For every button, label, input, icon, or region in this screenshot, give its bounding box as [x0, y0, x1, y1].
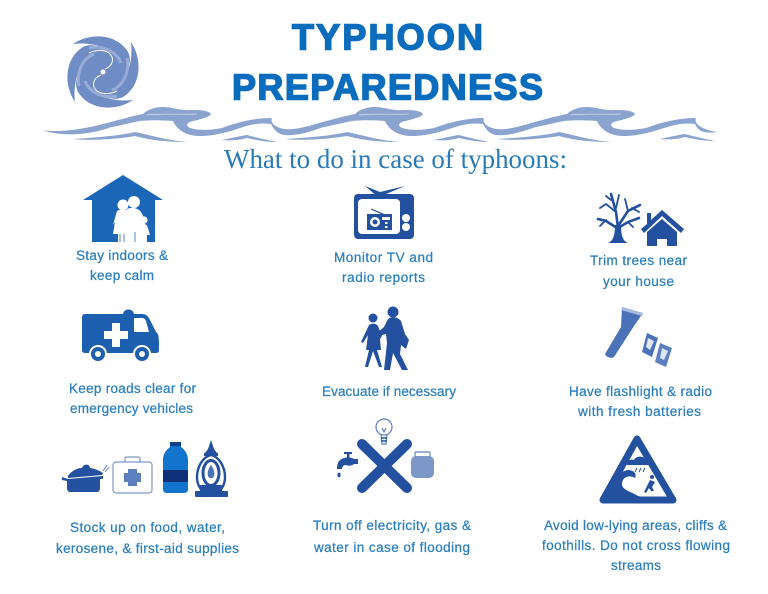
panel: keep roads clear: [69, 310, 196, 416]
icon: bare tree and house: [598, 194, 684, 246]
panel: turn off utilities: [313, 419, 471, 555]
label: your house: [603, 274, 674, 289]
label: with fresh batteries: [577, 404, 701, 419]
panel: evacuate: [322, 306, 456, 399]
icon: house with family: [83, 175, 163, 242]
panel: avoid low-lying areas: [542, 439, 730, 573]
panel: stock up: [56, 440, 239, 556]
label: streams: [611, 558, 661, 573]
label: Stock up on food, water,: [70, 520, 225, 535]
icon: water faucet: [337, 452, 358, 477]
label: [334, 250, 433, 285]
icon: first-aid kit: [113, 457, 152, 493]
subtitle: What to do in case of typhoons:: [224, 144, 567, 174]
label: [569, 384, 712, 419]
label: Stay indoors &: [76, 248, 168, 263]
label: Avoid low-lying areas, cliffs &: [544, 518, 727, 533]
icon: ambulance: [82, 310, 159, 363]
label: Evacuate if necessary: [322, 384, 456, 399]
icon: water bottle: [163, 442, 188, 493]
label: Have flashlight & radio: [569, 384, 712, 399]
icon: landslide warning triangle: [602, 439, 676, 503]
label: emergency vehicles: [70, 401, 193, 416]
label: water in case of flooding: [313, 540, 470, 555]
label: Keep roads clear for: [69, 381, 196, 396]
icon: gas tank: [411, 452, 434, 478]
label: [56, 520, 239, 556]
panel: monitor TV: [334, 186, 433, 285]
icon: lantern: [195, 440, 228, 497]
label: kerosene, & first-aid supplies: [56, 541, 239, 556]
icon: cooking pot: [62, 465, 109, 492]
panel: stay indoors: [76, 175, 168, 283]
label: foothills. Do not cross flowing: [542, 538, 730, 553]
icon: flashlight and batteries: [605, 307, 672, 367]
panel: trim trees: [590, 194, 688, 289]
icon: large X: [362, 444, 407, 488]
title: TYPHOON: [292, 16, 483, 58]
label: Turn off electricity, gas &: [313, 518, 471, 533]
label: Monitor TV and: [334, 250, 433, 265]
icon: light bulb: [376, 419, 392, 444]
label: [69, 381, 196, 416]
panel: flashlight and batteries: [569, 307, 712, 419]
label: Trim trees near: [590, 253, 688, 268]
label: [313, 518, 471, 555]
label: [542, 518, 730, 573]
label: keep calm: [90, 268, 154, 283]
title: PREPAREDNESS: [232, 66, 543, 108]
label: [76, 248, 168, 283]
title: [232, 16, 543, 108]
icon: typhoon swirl: [67, 36, 139, 108]
icon: TV and radio: [354, 186, 414, 239]
waves: [42, 107, 717, 142]
label: [590, 253, 688, 289]
label: radio reports: [342, 270, 425, 285]
icon: walking adult and child: [361, 306, 409, 370]
